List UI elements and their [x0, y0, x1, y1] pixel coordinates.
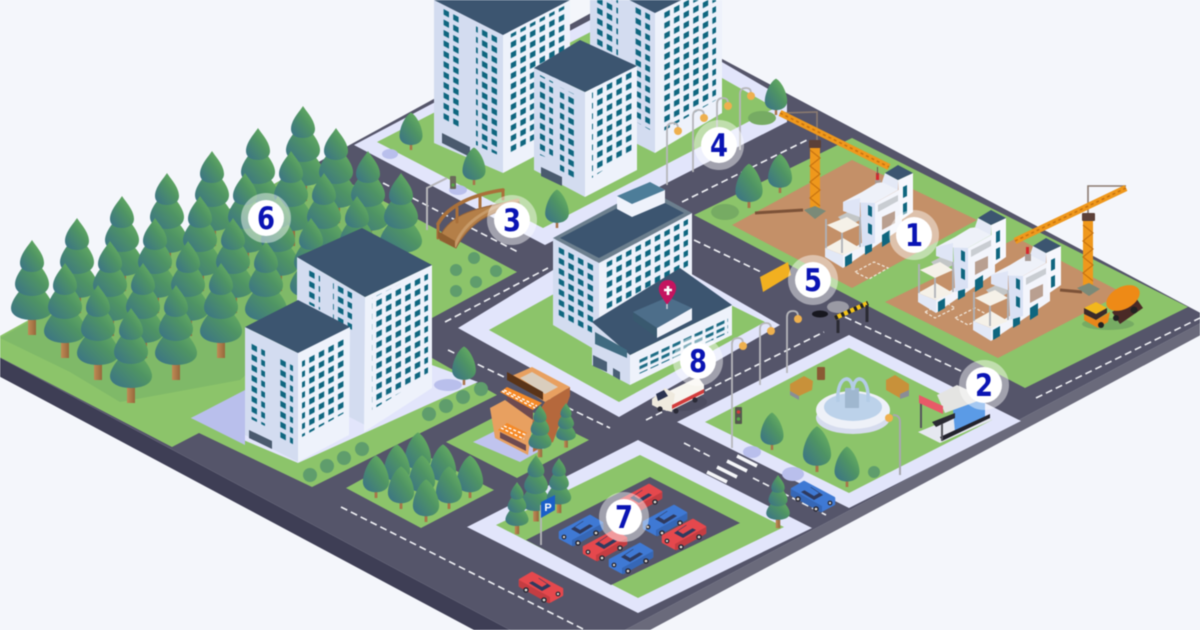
street lamps by marker 4 [667, 88, 755, 185]
icon: parking sign [541, 495, 555, 545]
construction crane 1 [780, 112, 889, 219]
shop and parking fir trees [505, 403, 576, 534]
panel: forest and tower block ground [0, 163, 517, 487]
hospital main tower [553, 182, 692, 352]
panel: top tower block ground [354, 8, 787, 245]
crosswalk [707, 456, 757, 482]
icon: hospital pin [659, 280, 676, 309]
forest of fir trees [11, 106, 422, 403]
street lamps by hospital [732, 311, 802, 448]
traffic light [735, 407, 742, 424]
crane 2 [1015, 186, 1126, 296]
marker 4 [694, 120, 744, 170]
marker 6: 6 [257, 201, 275, 237]
tower: rear top left [434, 0, 570, 173]
park lamp [885, 414, 900, 475]
marker 5 [788, 255, 838, 305]
fir beside crosswalk [766, 475, 790, 528]
shrubs beside towers [303, 252, 502, 482]
panel: tree cluster ground [346, 450, 494, 528]
road lane markings [341, 140, 1200, 630]
panel: construction block [694, 111, 1188, 388]
marker 6 [241, 193, 291, 243]
buildings under construction, marker 1 group [825, 165, 1061, 341]
hospital annex [592, 268, 732, 385]
park benches and bin [790, 367, 909, 400]
tower: front left [245, 300, 350, 462]
tower: back left [297, 228, 432, 432]
lamp and traffic light near bridge [427, 176, 456, 230]
park trees [760, 413, 880, 487]
panel: fountain park ground [677, 335, 1021, 508]
marker 5: 5 [804, 263, 822, 299]
icon: parking sign: P [544, 502, 552, 514]
marker 2: 2 [975, 368, 993, 404]
marker 4: 4 [710, 128, 728, 164]
marker 1 [889, 210, 939, 260]
panel: shop block ground [446, 405, 589, 478]
marker 1: 1 [905, 218, 923, 254]
icon: fountain [816, 379, 890, 434]
icon: yellow road barrier [760, 262, 791, 292]
tree cluster [363, 432, 483, 522]
marker 3 [487, 195, 537, 245]
panel: parking block [467, 440, 812, 613]
trees around top block [399, 79, 792, 228]
tower: rear top right [590, 0, 722, 153]
shop building [490, 367, 570, 455]
marker 7: 7 [615, 500, 633, 536]
marker 2 [959, 360, 1009, 410]
parked and road cars [519, 482, 834, 604]
marker 3: 3 [503, 203, 521, 239]
icon: ambulance [652, 377, 707, 414]
marker 7 [599, 492, 649, 542]
marker 8: 8 [689, 344, 707, 380]
panel: hospital block ground [458, 250, 780, 417]
roadworks: barrier, manhole and workers [812, 301, 868, 333]
icon: cement mixer truck [1082, 280, 1144, 330]
icon: bus stop [918, 385, 992, 443]
tower: rear centre [534, 40, 637, 197]
icon: wooden bridge [438, 190, 520, 248]
tree by road near tall tower [452, 347, 476, 385]
marker 8 [673, 336, 723, 386]
